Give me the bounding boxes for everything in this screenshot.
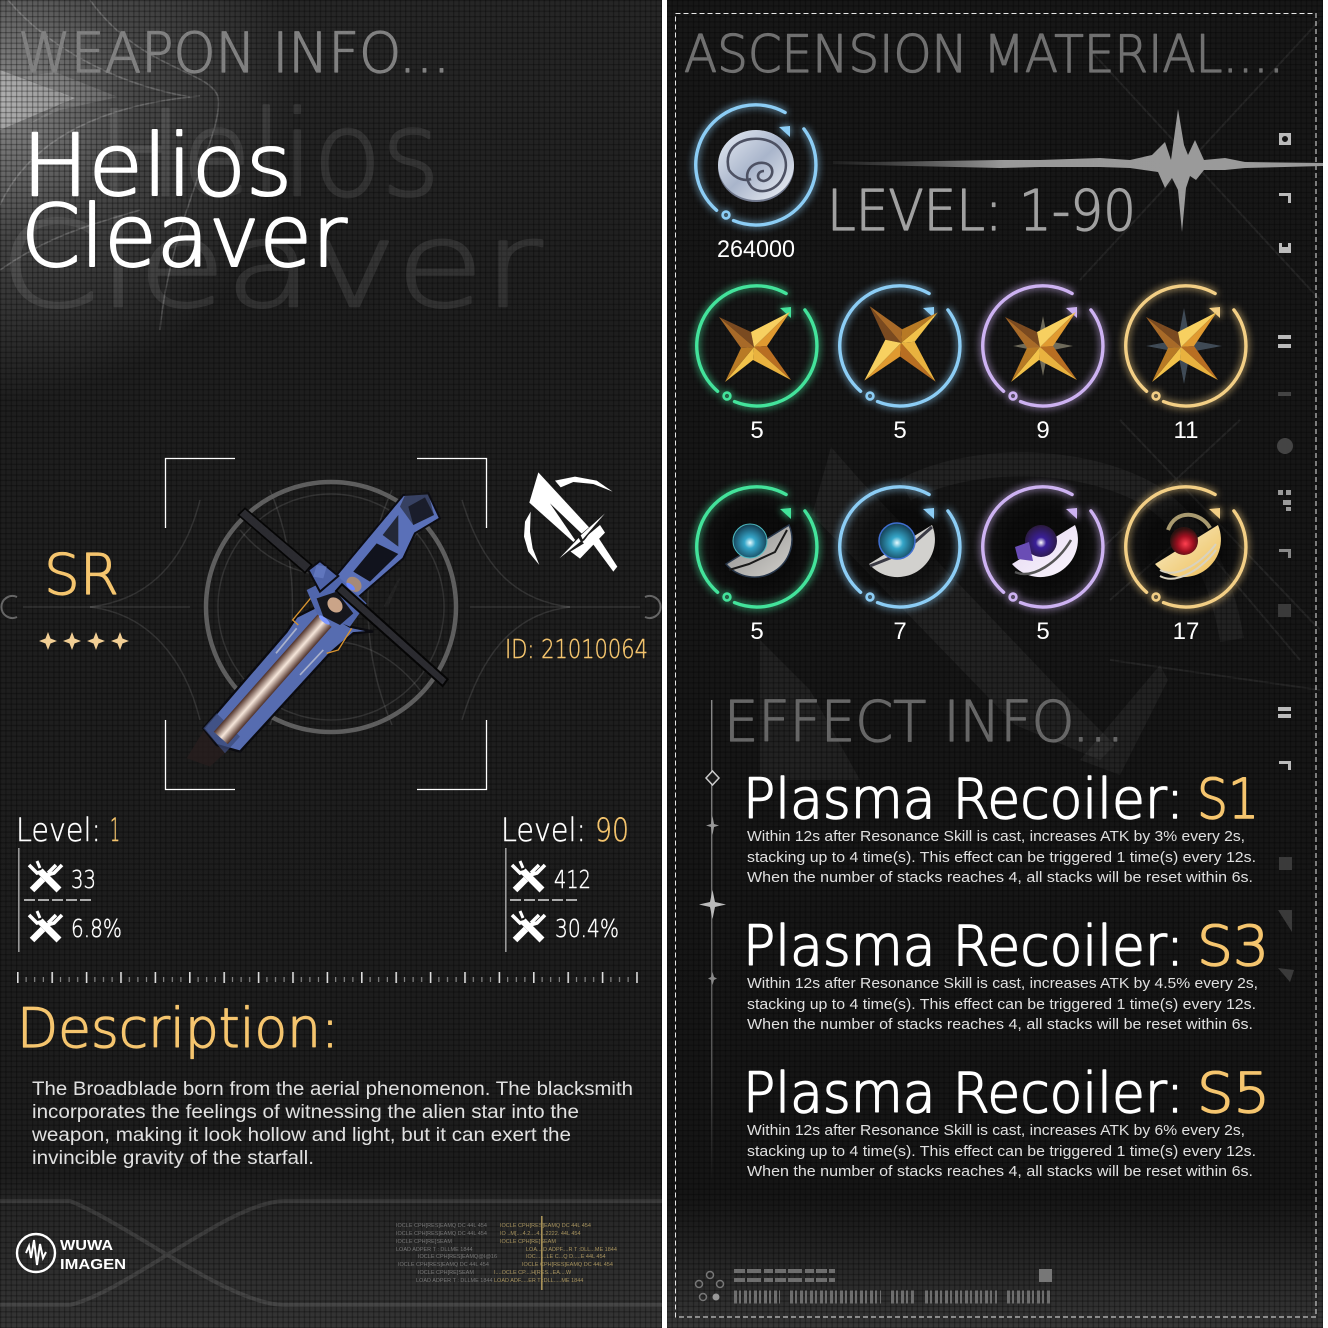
data readout: LOAD ADF.....ER T :DLL.....ME 1844 xyxy=(494,1278,583,1284)
left end ring xyxy=(1,596,17,618)
panel: weapon info xyxy=(0,21,662,1305)
level range: LEVEL: 1-90 xyxy=(827,179,1136,244)
description text: invincible gravity of the starfall. xyxy=(32,1148,314,1169)
side glyph column xyxy=(1277,133,1294,982)
title: weapon name: Cleaver xyxy=(21,187,348,287)
weapon type icon xyxy=(524,472,617,572)
stats: level 90: 30.4% xyxy=(555,914,619,943)
effect: S3: Within 12s after Resonance Skill is cast, increases ATK by 4.5% every 2s, xyxy=(747,975,1258,992)
ghost weapon name xyxy=(0,85,543,334)
icon: attack xyxy=(29,861,62,890)
data readout: IOCLE CPH[RE]SEAM xyxy=(500,1239,556,1245)
material: orb tier 3 xyxy=(981,485,1105,645)
effect: S3: Plasma Recoiler: xyxy=(743,914,1184,978)
right end ring xyxy=(645,596,661,618)
stats: level 1: 1 xyxy=(110,811,120,849)
description text xyxy=(31,1079,633,1169)
effect: S5: Within 12s after Resonance Skill is cast, increases ATK by 6% every 2s, xyxy=(747,1122,1245,1139)
material: star tier 3: 9 xyxy=(1036,417,1050,444)
material: star tier 1: 5 xyxy=(750,417,764,444)
effect: S5 xyxy=(743,1061,1270,1180)
backdrop ornament behind weapon xyxy=(23,490,640,725)
panel: right emblem xyxy=(760,20,1320,780)
data readout: IOCLE CPH[RES]EAMQ DC 44L 454 xyxy=(396,1223,487,1229)
stats: level 1: Level: xyxy=(16,811,101,849)
effect: S3: stacking up to 4 time(s). This effect can be triggered 1 time(s) every 12s. xyxy=(747,996,1256,1013)
material: orb tier 1: 5 xyxy=(750,618,764,645)
weapon frame xyxy=(166,458,486,790)
material: orb tier 3: 5 xyxy=(1036,618,1050,645)
description text: The Broadblade born from the aerial phenomenon. The blacksmith xyxy=(32,1079,633,1100)
data readout: IOCLE CPH[RES]EAMQ DC 44L 454 xyxy=(398,1262,489,1268)
data readout: IOCLE CPH[RE]SEAM xyxy=(396,1239,452,1245)
weapon id: ID: 21010064 xyxy=(505,635,648,665)
data readout: I....OCLE CP....H[RES...EA....W xyxy=(494,1270,572,1276)
data readout: IOCLE CPH[RES]EAMQ DC 44L 454 xyxy=(500,1223,591,1229)
title: weapon name xyxy=(21,116,348,287)
effect: S5: stacking up to 4 time(s). This effect can be triggered 1 time(s) every 12s. xyxy=(747,1143,1256,1160)
material: orb tier 1 xyxy=(695,485,819,645)
weapon emblem ring xyxy=(206,482,456,732)
effect: S3 xyxy=(743,914,1269,1033)
data readout: IO ..M[....4.2....4....2222. 44L 454 xyxy=(500,1231,581,1237)
material: star tier 2: 5 xyxy=(893,417,907,444)
heading: weapon info: WEAPON INFO... xyxy=(18,21,450,85)
top-left light burst xyxy=(0,0,300,400)
material: star tier 4 xyxy=(1126,286,1246,444)
stats: level 90: Level: xyxy=(501,811,586,849)
stats: level 90: 90 xyxy=(595,811,629,849)
icon: crit xyxy=(512,911,545,940)
material: orb tier 2 xyxy=(838,485,962,645)
heading: ascension material: ASCENSION MATERIAL.... xyxy=(684,25,1284,85)
material: star tier 4: 11 xyxy=(1174,417,1198,444)
description text: weapon, making it look hollow and light, but it can exert the xyxy=(31,1125,571,1146)
data readout: LOAD ADPER T : DLLME 1844 xyxy=(416,1278,493,1284)
logo xyxy=(17,1234,126,1273)
stats: level 1: 33 xyxy=(71,865,96,894)
title: weapon name: Helios xyxy=(22,116,292,216)
material: star tier 2 xyxy=(840,286,960,444)
material: shell credit: 264000 xyxy=(717,236,795,263)
effect: S1: S1 xyxy=(1197,767,1259,831)
stats: level 1: 6.8% xyxy=(71,914,122,943)
effect: S1 xyxy=(743,767,1259,886)
timeline xyxy=(699,700,726,1180)
effect: S1: Within 12s after Resonance Skill is cast, increases ATK by 3% every 2s, xyxy=(747,828,1245,845)
effect: S1: Plasma Recoiler: xyxy=(743,767,1184,831)
data readout: IOCLE CPH[RE]SEAM xyxy=(418,1270,474,1276)
icon: coin xyxy=(718,130,794,202)
panel: ascension and effects xyxy=(676,14,1323,1317)
footer ornament xyxy=(696,1269,1052,1300)
effect: S5: Plasma Recoiler: xyxy=(743,1061,1184,1125)
material: star tier 1 xyxy=(697,286,817,444)
description text: incorporates the feelings of witnessing the alien star into the xyxy=(32,1102,579,1123)
data readout: LOAD ADPER T : DLLME 1844 xyxy=(396,1247,473,1253)
sound wave ornament xyxy=(833,109,1323,232)
icon: attack xyxy=(512,861,545,890)
data readout: LOA....D ADPF....R T :DLL...ME 1844 xyxy=(526,1247,617,1253)
data readout: IOCLE CPH[RES]EAMQ DC 44L 454 xyxy=(522,1262,613,1268)
heading: description: Description: xyxy=(17,997,339,1060)
effect: S3: S3 xyxy=(1197,914,1269,978)
data readout: IOCLE CPH[RES]EAMQ@I@16 xyxy=(418,1254,497,1260)
stats: level 1 xyxy=(16,811,122,952)
material: orb tier 2: 7 xyxy=(893,618,907,645)
material: star tier 3 xyxy=(983,286,1103,444)
ghost weapon name: Cleaver xyxy=(0,196,543,334)
effect: S1: stacking up to 4 time(s). This effect can be triggered 1 time(s) every 12s. xyxy=(747,849,1256,866)
effect: S3: When the number of stacks reaches 4, all stacks will be reset within 6s. xyxy=(747,1016,1253,1033)
effect: S5: S5 xyxy=(1197,1061,1270,1125)
material: orb tier 4 xyxy=(1124,485,1248,645)
stats: level 90 xyxy=(501,811,629,952)
ghost weapon name: Helios xyxy=(98,85,440,223)
footer band curves xyxy=(0,1201,662,1305)
rarity stars xyxy=(39,632,129,650)
logo: IMAGEN xyxy=(60,1256,126,1273)
data readout xyxy=(396,1216,617,1290)
effect: S5: When the number of stacks reaches 4, all stacks will be reset within 6s. xyxy=(747,1163,1253,1180)
icon: crit xyxy=(29,911,62,940)
rarity label: SR xyxy=(44,543,119,608)
logo: WUWA xyxy=(60,1237,113,1254)
material: orb tier 4: 17 xyxy=(1173,618,1199,645)
weapon: broadblade xyxy=(187,492,448,767)
heading: effect info: EFFECT INFO... xyxy=(724,690,1124,755)
stats: level 90: 412 xyxy=(554,865,591,894)
data readout: IOC.......LE C...Q D.....E 44L 454 xyxy=(526,1254,606,1260)
data readout: IOCLE CPH[RES]EAMQ DC 44L 454 xyxy=(396,1231,487,1237)
effect: S1: When the number of stacks reaches 4, all stacks will be reset within 6s. xyxy=(747,869,1253,886)
dashed frame xyxy=(676,14,1316,1317)
material: shell credit xyxy=(696,105,816,263)
